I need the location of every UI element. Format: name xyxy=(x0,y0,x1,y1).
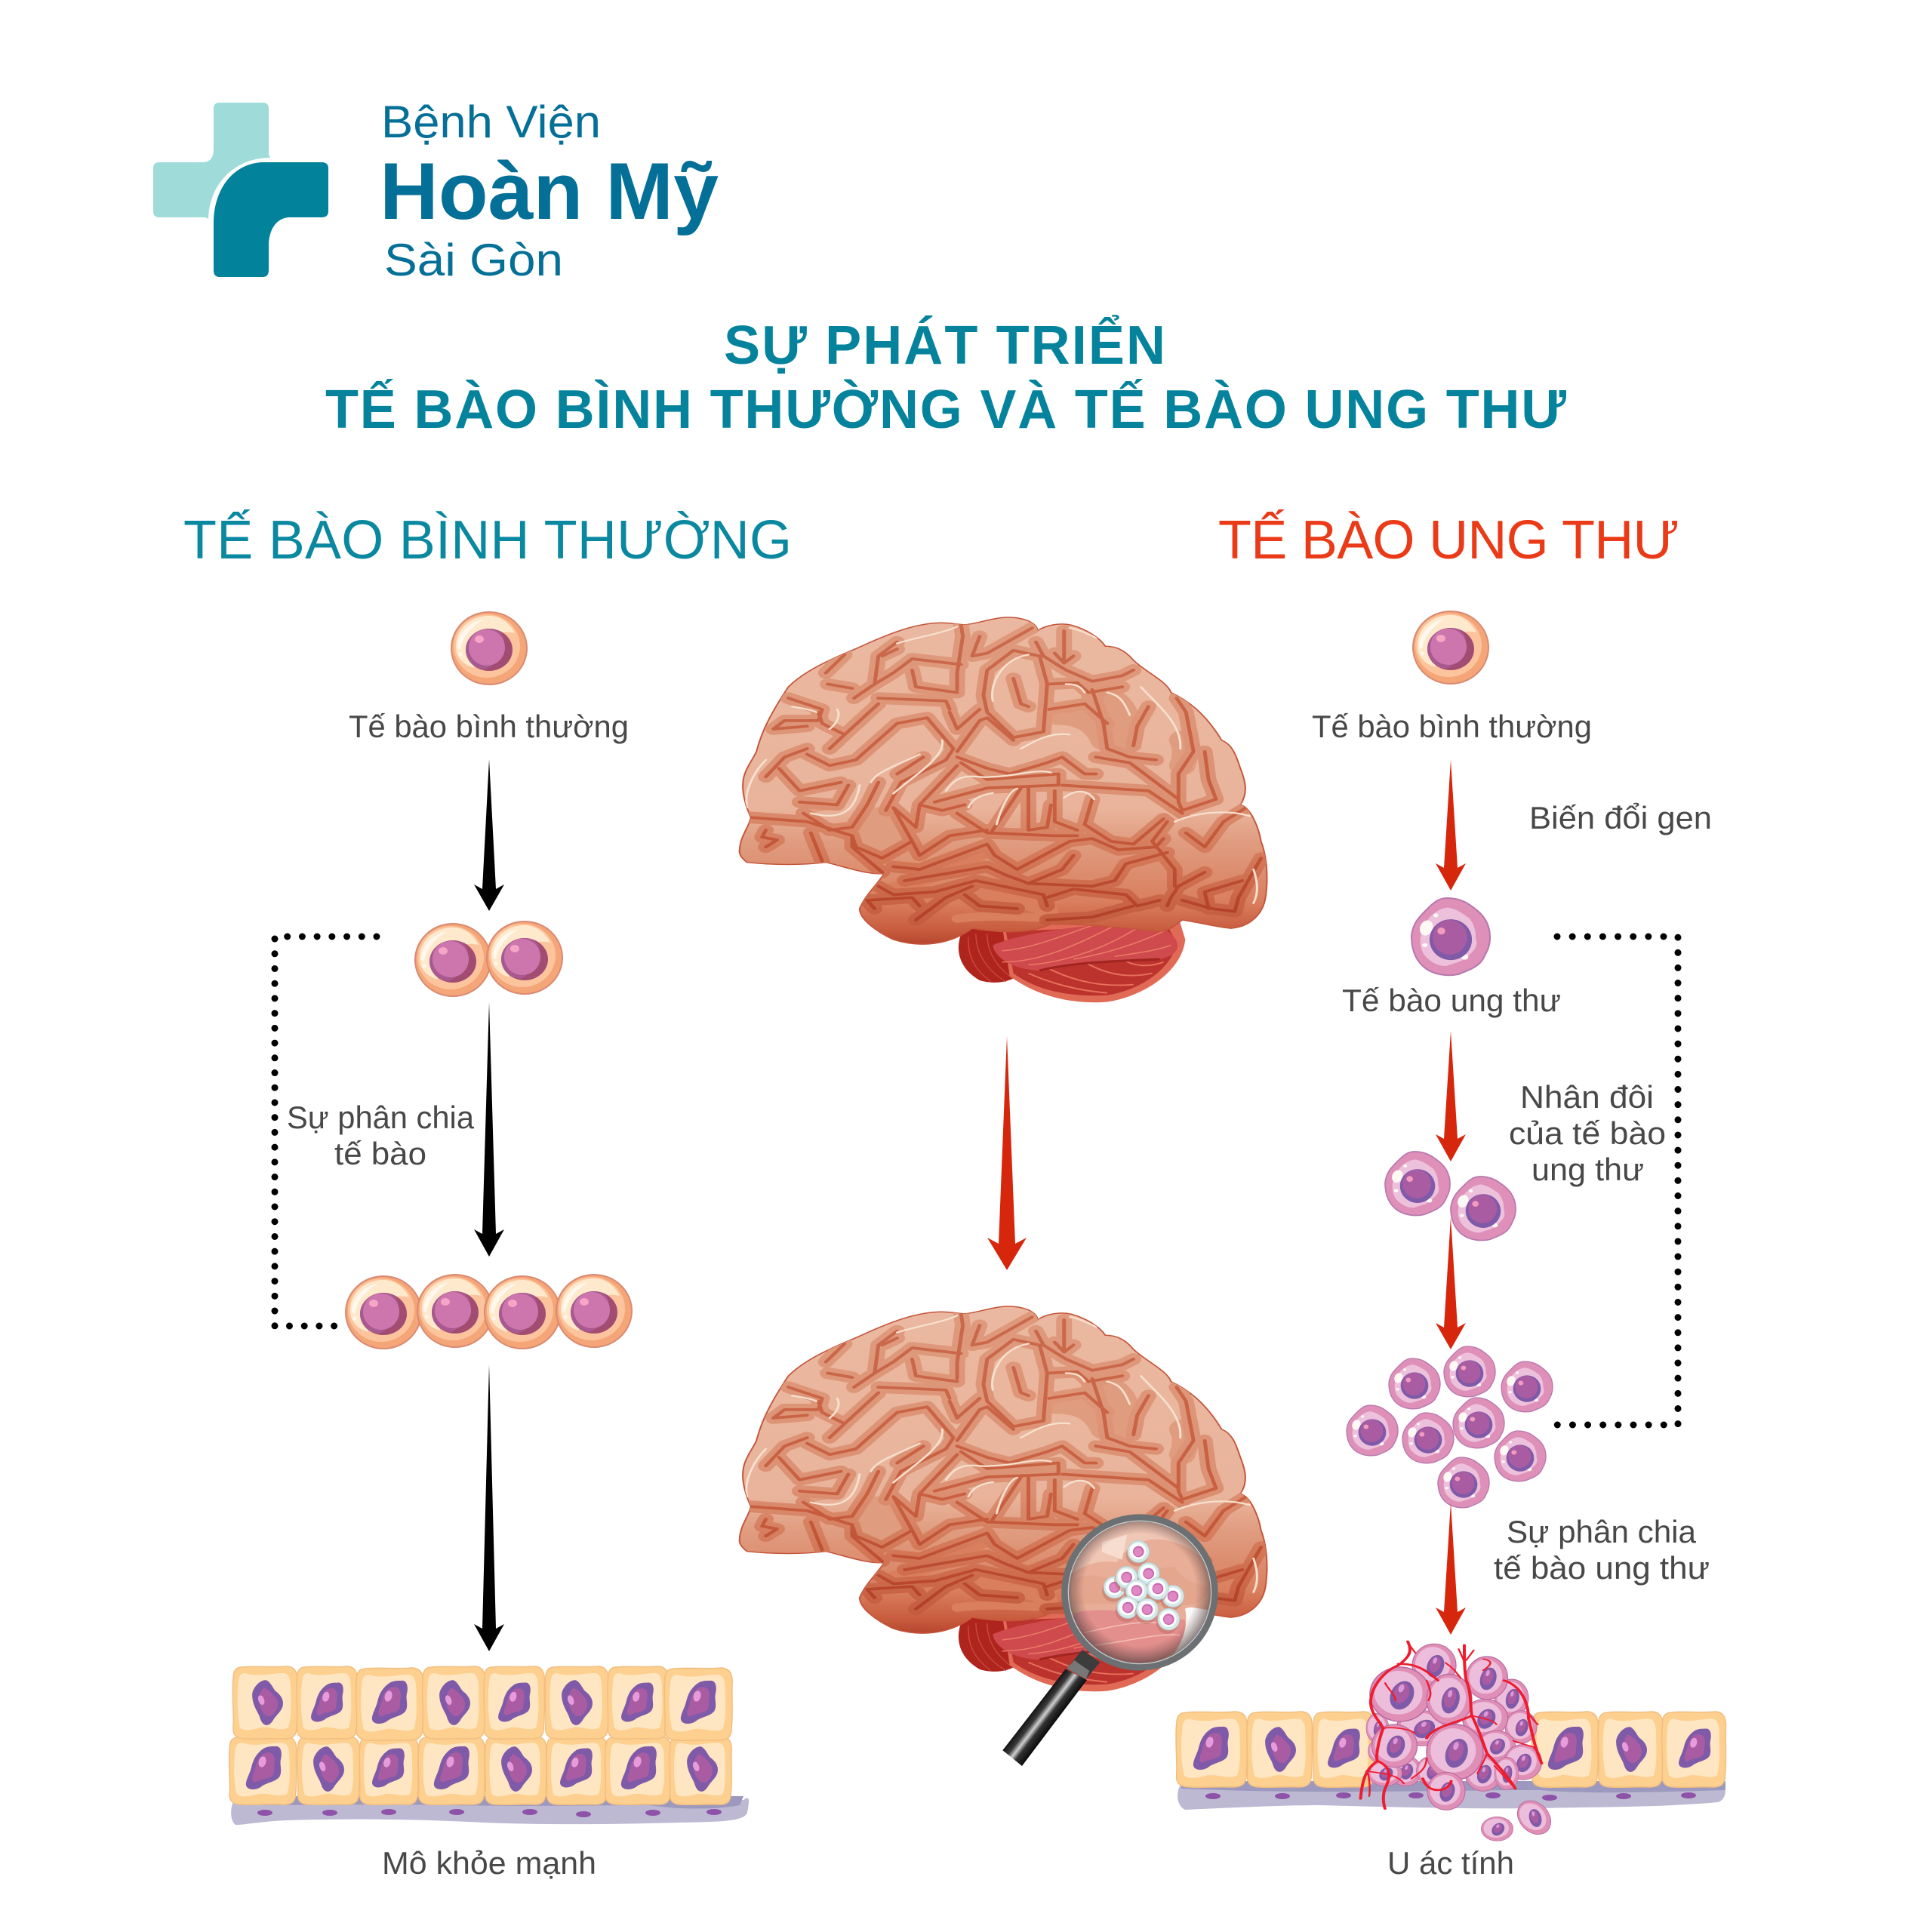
heading: normal cells: TẾ BÀO BÌNH THƯỜNG xyxy=(183,509,792,571)
arrow: to malignant tumour xyxy=(1436,1503,1466,1635)
logo: Bệnh Viện Hoàn Mỹ Sài Gòn xyxy=(153,97,719,285)
title: TẾ BÀO BÌNH THƯỜNG VÀ TẾ BÀO UNG THƯ xyxy=(325,379,1566,440)
label: healthy tissue: Mô khỏe mạnh xyxy=(382,1845,596,1881)
malignant tumour in tissue xyxy=(1176,1641,1726,1841)
panel: cancer cell development xyxy=(1176,611,1726,1881)
logo text xyxy=(380,97,719,285)
label: cancer cell duplication: ung thư xyxy=(1532,1152,1644,1187)
label: cancer cell: Tế bào ung thư xyxy=(1342,983,1561,1018)
dotted bracket: cancer replication xyxy=(1557,937,1678,1425)
arrow: to healthy tissue xyxy=(474,1364,504,1651)
four normal cells xyxy=(346,1275,632,1349)
label: cancer cell division: Sự phân chia xyxy=(1507,1514,1697,1549)
arrow: to four cells xyxy=(474,1002,504,1257)
single normal cell xyxy=(1413,611,1488,684)
single normal cell xyxy=(451,612,527,685)
title: SỰ PHÁT TRIỂN xyxy=(724,315,1165,376)
title xyxy=(325,315,1566,440)
label: malignant tumour: U ác tính xyxy=(1387,1845,1514,1881)
two cancer cells xyxy=(1385,1152,1516,1241)
label: cell division: Sự phân chia xyxy=(287,1100,475,1135)
arrow: to two cancer cells xyxy=(1436,1031,1466,1161)
label: normal cell: Tế bào bình thường xyxy=(1312,709,1592,744)
arrow: to two cells xyxy=(474,759,504,911)
cancer cell cluster xyxy=(1347,1346,1553,1508)
cancer cell xyxy=(1411,898,1490,975)
label: cancer cell division: tế bào ung thư xyxy=(1494,1550,1710,1586)
heading: cancer cells: TẾ BÀO UNG THƯ xyxy=(1218,509,1679,571)
label: normal cell: Tế bào bình thường xyxy=(349,709,629,744)
icon: medical cross xyxy=(153,103,328,277)
panel: normal cell development xyxy=(229,612,749,1881)
healthy brain xyxy=(740,617,1267,1002)
brain with tumour xyxy=(740,1306,1267,1691)
healthy tissue xyxy=(229,1666,749,1825)
logo text: Hoàn Mỹ xyxy=(380,146,719,236)
logo text: Sài Gòn xyxy=(384,235,563,285)
icon: magnifying glass over tumour xyxy=(1002,1518,1214,1766)
label: gene mutation: Biến đổi gen xyxy=(1529,800,1712,835)
two normal cells xyxy=(415,921,562,996)
infographic canvas xyxy=(153,103,1727,1879)
label: cancer cell duplication: Nhân đôi xyxy=(1520,1079,1654,1115)
arrow: to cancer cell cluster xyxy=(1436,1217,1466,1349)
label: cell division: tế bào xyxy=(334,1136,426,1171)
label: cell division xyxy=(287,1100,475,1171)
logo text: Bệnh Viện xyxy=(381,97,601,147)
arrow: gene mutation xyxy=(1436,760,1466,891)
panel: brain illustrations xyxy=(740,617,1267,1766)
label: cancer cell duplication xyxy=(1509,1079,1666,1187)
label: cancer cell division xyxy=(1494,1514,1710,1586)
label: cancer cell duplication: của tế bào xyxy=(1509,1115,1666,1151)
arrow: brain progression xyxy=(987,1036,1027,1270)
dotted bracket: cell division xyxy=(275,937,377,1326)
